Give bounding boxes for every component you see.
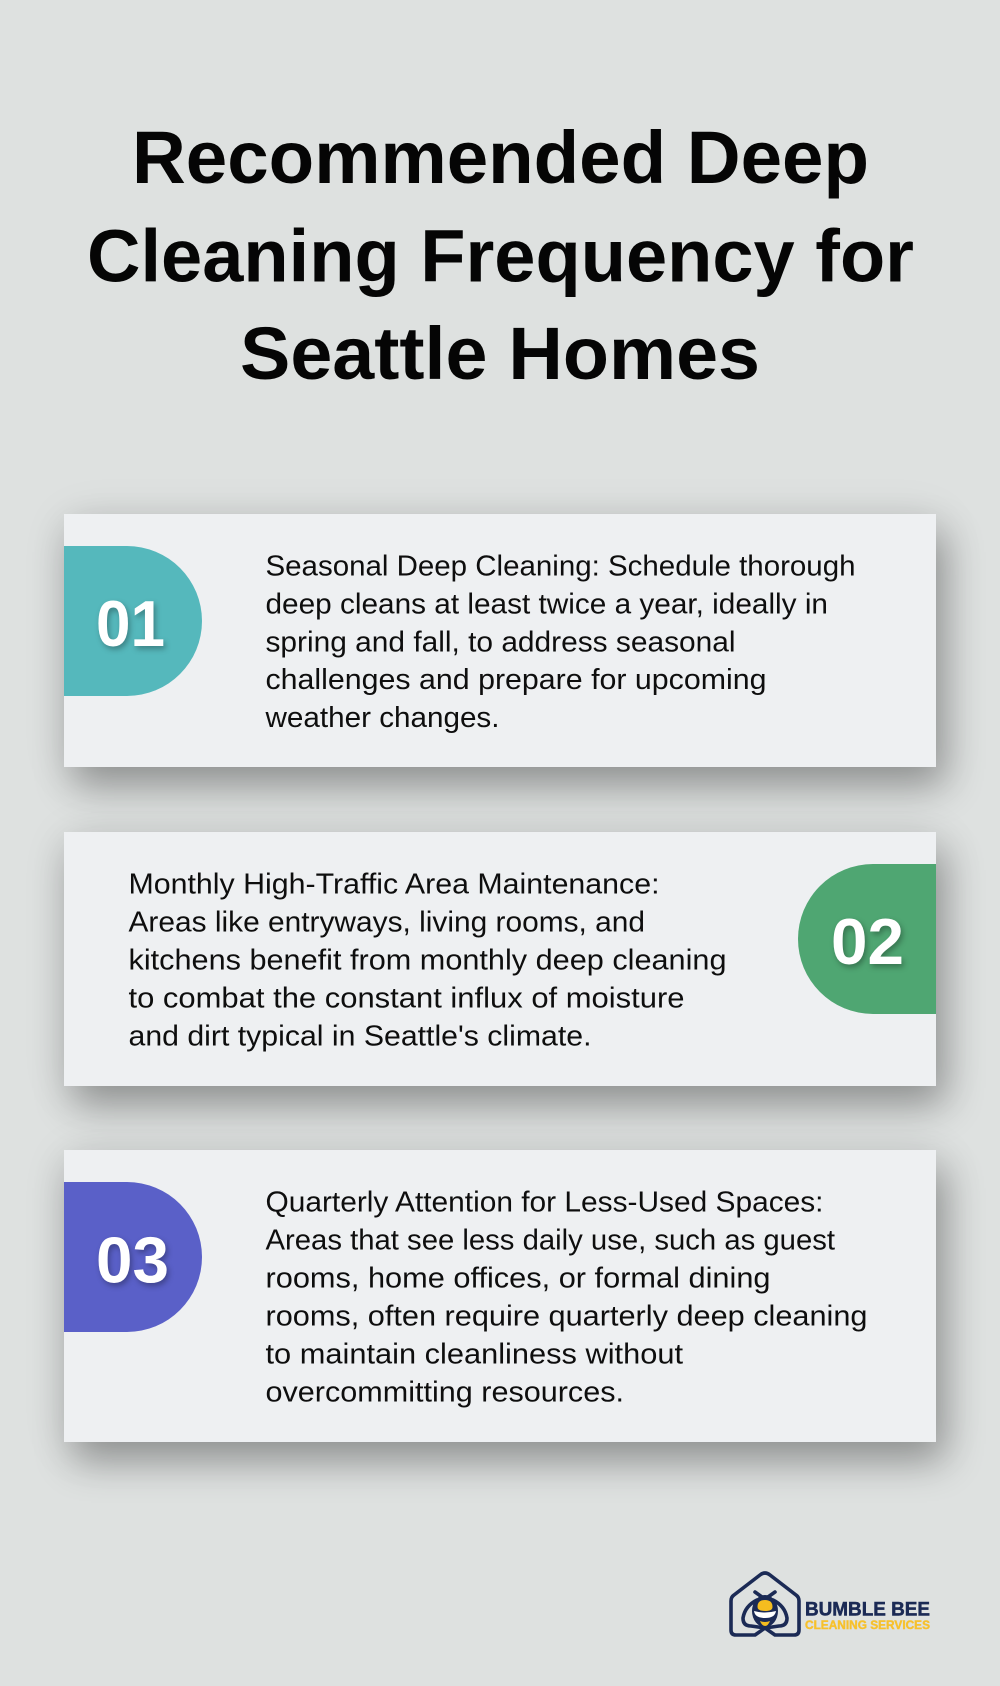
text: monthly high-traffic maintenance: to combat the constant influx of moisture: [128, 982, 684, 1014]
text: seasonal deep cleaning: Seasonal Deep Cleaning: Schedule thorough: [266, 551, 856, 583]
badge: 01: [64, 546, 202, 696]
title: Recommended Deep: [132, 116, 869, 199]
text: quarterly less-used spaces: [266, 1187, 868, 1408]
wordmark: Cleaning Services: CLEANING SERVICES: [805, 1620, 930, 1632]
logo: Bumble Bee Cleaning Services: [729, 1571, 930, 1637]
text: seasonal deep cleaning: challenges and prepare for upcoming: [266, 664, 766, 696]
number 02: 02: [831, 905, 904, 978]
title: Seattle Homes: [240, 312, 760, 395]
text: monthly high-traffic maintenance: and dirt typical in Seattle's climate.: [128, 1020, 592, 1052]
text: monthly high-traffic maintenance: Monthly High-Traffic Area Maintenance:: [128, 868, 660, 900]
text: quarterly less-used spaces: to maintain cleanliness without: [266, 1338, 683, 1370]
text: seasonal deep cleaning: deep cleans at least twice a year, ideally in: [266, 588, 828, 620]
text: monthly high-traffic maintenance: kitchens benefit from monthly deep cleaning: [128, 944, 726, 976]
text: monthly high-traffic maintenance: [128, 868, 726, 1052]
text: quarterly less-used spaces: rooms, home offices, or formal dining: [266, 1262, 770, 1294]
badge: 02: [798, 864, 936, 1014]
text: seasonal deep cleaning: spring and fall, to address seasonal: [266, 626, 736, 658]
panel: monthly high-traffic maintenance: [64, 832, 936, 1086]
panel: seasonal deep cleaning: [64, 514, 936, 767]
number 03: 03: [96, 1224, 169, 1296]
text: quarterly less-used spaces: rooms, often require quarterly deep cleaning: [266, 1300, 868, 1332]
badge: 03: [64, 1182, 202, 1332]
text: monthly high-traffic maintenance: Areas like entryways, living rooms, and: [128, 906, 645, 938]
text: seasonal deep cleaning: [264, 551, 856, 734]
panel: quarterly less-used spaces: [64, 1150, 936, 1442]
wordmark: Bumble Bee: BUMBLE BEE: [805, 1600, 930, 1620]
text: quarterly less-used spaces: Quarterly Attention for Less-Used Spaces:: [266, 1187, 824, 1219]
text: seasonal deep cleaning: weather changes.: [264, 702, 500, 734]
icon: house outline with bee: [731, 1573, 799, 1635]
text: quarterly less-used spaces: Areas that see less daily use, such as guest: [266, 1225, 835, 1257]
number 01: 01: [96, 587, 165, 660]
title: [87, 116, 914, 395]
text: quarterly less-used spaces: overcommitting resources.: [266, 1376, 624, 1408]
title: Cleaning Frequency for: [87, 214, 914, 298]
